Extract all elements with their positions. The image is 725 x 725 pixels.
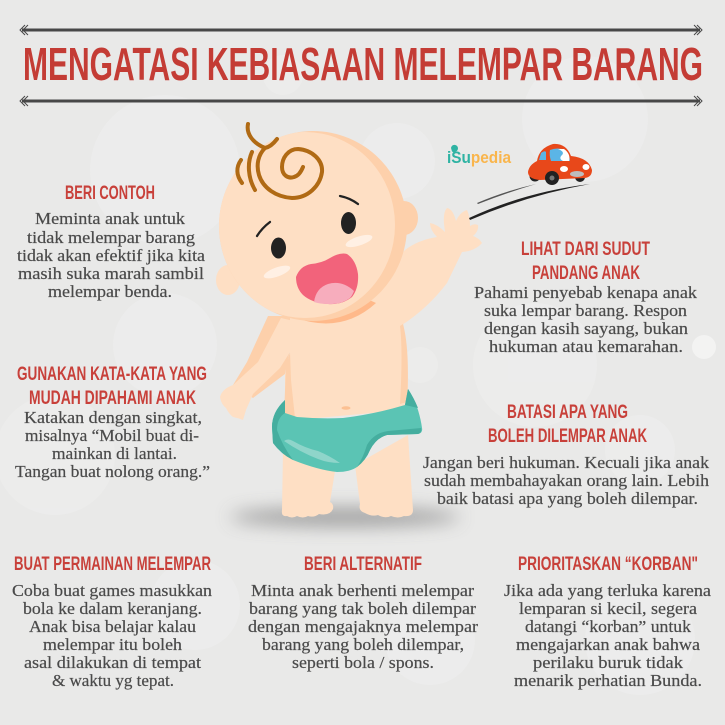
body text: menarik perhatian Bunda. xyxy=(514,671,702,690)
tongue xyxy=(314,283,354,304)
heading: BUAT PERMAINAN MELEMPAR xyxy=(14,553,211,575)
heading: GUNAKAN KATA-KATA YANG xyxy=(17,363,207,385)
panel: batasi apa yang boleh dilempar xyxy=(423,401,710,508)
ear left xyxy=(216,265,240,295)
body text: mengajarkan anak bahwa xyxy=(516,635,701,654)
body text: Pahami penyebab kenapa anak xyxy=(474,283,698,302)
body text xyxy=(15,408,210,481)
face xyxy=(257,196,374,304)
heading: BOLEH DILEMPAR ANAK xyxy=(488,425,647,447)
body text: lemparan si kecil, segera xyxy=(519,599,698,618)
body text xyxy=(248,581,479,672)
diaper highlight xyxy=(284,440,340,463)
body text: sudah membahayakan orang lain. Lebih xyxy=(424,471,710,490)
heading: LIHAT DARI SUDUT xyxy=(521,238,650,260)
torso xyxy=(284,318,408,420)
heading: BATASI APA YANG xyxy=(507,401,628,423)
panel: buat permainan melempar xyxy=(12,553,212,690)
body text: hukuman atau kemarahan. xyxy=(489,337,683,356)
body text xyxy=(423,453,710,508)
bottom arrow divider xyxy=(20,96,702,106)
eyebrows xyxy=(257,196,358,236)
body text: Katakan dengan singkat, xyxy=(24,408,202,427)
hair xyxy=(237,124,322,198)
body text: melempar benda. xyxy=(48,282,172,301)
body text: tidak melempar barang xyxy=(27,228,195,247)
body text: dengan kasih sayang, bukan xyxy=(484,319,688,338)
body text: melempar itu boleh xyxy=(43,635,183,654)
left leg xyxy=(282,450,336,518)
heading: BERI CONTOH xyxy=(65,182,155,204)
body text: misalnya “Mobil buat di- xyxy=(25,426,199,445)
diaper xyxy=(272,389,422,472)
body text xyxy=(12,581,212,690)
body text: baik batasi apa yang boleh dilempar. xyxy=(437,489,698,508)
right arm xyxy=(340,208,482,325)
head xyxy=(215,131,407,321)
belly button xyxy=(342,406,350,410)
body text: Jangan beri hukuman. Kecuali jika anak xyxy=(423,453,710,472)
left arm xyxy=(220,316,298,420)
body text: Minta anak berhenti melempar xyxy=(251,581,475,600)
body text: Coba buat games masukkan xyxy=(12,581,212,600)
body text: mainkan di lantai. xyxy=(52,444,177,463)
body text: bola ke dalam keranjang. xyxy=(23,599,202,618)
body text: suka lempar barang. Respon xyxy=(484,301,687,320)
top arrow divider xyxy=(20,25,702,35)
body text: Anak bisa belajar kalau xyxy=(29,617,196,636)
body text: masih suka marah sambil xyxy=(18,264,204,283)
heading xyxy=(488,401,647,447)
panel: lihat dari sudut pandang anak xyxy=(474,238,698,356)
panel: beri alternatif xyxy=(248,553,479,672)
ground shadow xyxy=(230,508,460,526)
body text: Tangan buat nolong orang.” xyxy=(15,462,210,481)
neck crescent xyxy=(296,298,376,323)
baby illustration xyxy=(215,124,482,518)
heading: MUDAH DIPAHAMI ANAK xyxy=(29,387,196,409)
ear right xyxy=(390,201,418,235)
mouth xyxy=(296,254,358,304)
panel: prioritaskan korban xyxy=(504,553,712,690)
heading: PANDANG ANAK xyxy=(532,262,640,284)
body text: barang yang tak boleh dilempar xyxy=(249,599,477,618)
heading xyxy=(17,363,207,409)
body text: barang yang boleh dilempar, xyxy=(262,635,464,654)
body text: tidak akan efektif jika kita xyxy=(17,246,206,265)
body text: Jika ada yang terluka karena xyxy=(504,581,712,600)
body text: asal dilakukan di tempat xyxy=(24,653,201,672)
heading: BERI ALTERNATIF xyxy=(304,553,422,575)
logo mark xyxy=(451,145,458,152)
body text xyxy=(17,209,206,301)
body text: datangi “korban” untuk xyxy=(525,617,692,636)
body text: dengan mengajaknya melempar xyxy=(248,617,479,636)
panel: beri contoh xyxy=(17,182,206,301)
body text: perilaku buruk tidak xyxy=(533,653,684,672)
body text: seperti bola / spons. xyxy=(292,653,434,672)
body text xyxy=(504,581,712,690)
right leg xyxy=(355,435,413,518)
windows xyxy=(550,148,570,161)
body text: & waktu yg tepat. xyxy=(52,671,174,690)
logo: iSupedia xyxy=(447,148,511,167)
car body xyxy=(528,144,592,180)
heading xyxy=(521,238,650,284)
body text: Meminta anak untuk xyxy=(35,209,186,228)
body text xyxy=(474,283,698,356)
eyes xyxy=(271,212,356,258)
cheeks xyxy=(262,232,374,281)
panel: gunakan kata-kata xyxy=(15,363,210,481)
motion lines xyxy=(469,184,590,220)
car xyxy=(528,144,592,185)
